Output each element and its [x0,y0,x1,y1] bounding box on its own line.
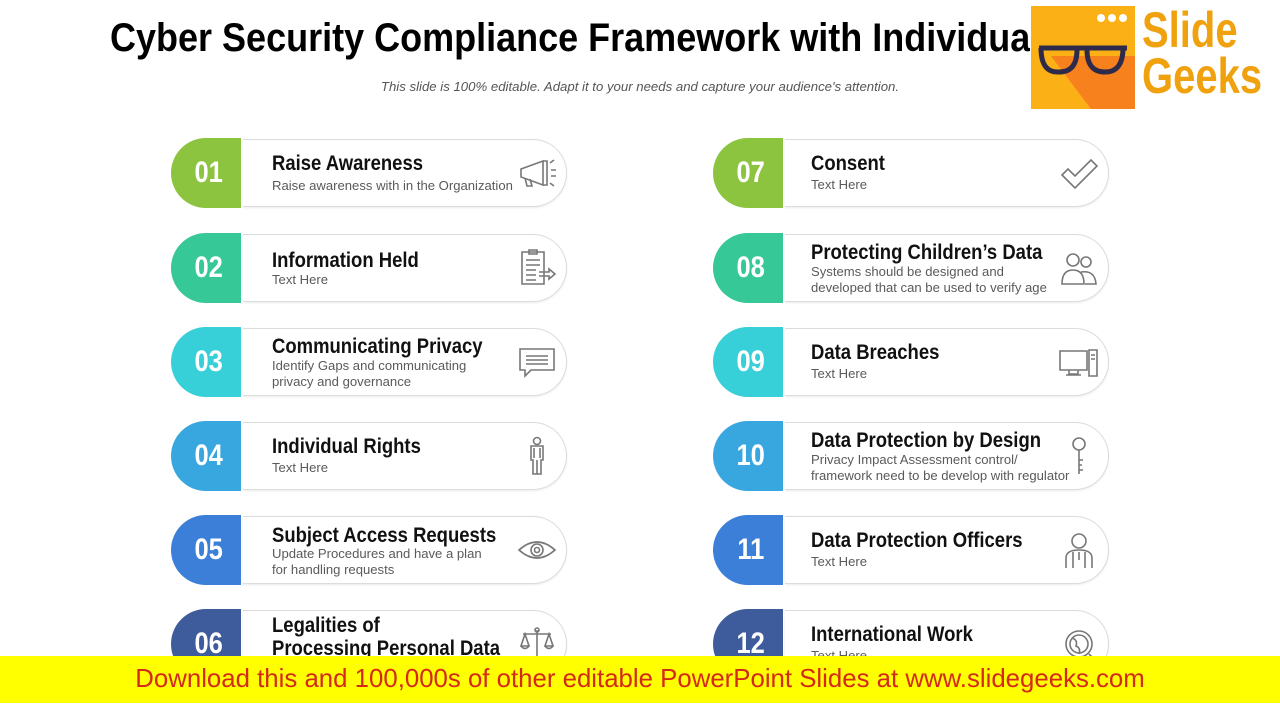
item 03: Identify Gaps and communicating [272,358,466,373]
logo icon [1031,6,1135,109]
item 01 [171,138,567,208]
item 09: Text Here [811,366,867,381]
item 07: Text Here [811,177,867,192]
icon: computer [1059,349,1098,377]
item 12: International Work [811,623,973,646]
icon: key [1072,437,1086,474]
icon: megaphone [520,160,556,187]
icon: check [1061,159,1098,189]
item 05 [171,515,567,585]
item 06: 06 [195,627,223,660]
item 03 [171,327,567,397]
item 08: developed that can be used to verify age [811,280,1047,295]
logo text [1142,2,1262,104]
item 08: 08 [737,251,765,284]
banner: Download this and 100,000s of other editable PowerPoint Slides at www.slidegeeks.com [135,665,1145,693]
item 12 [713,609,1109,663]
item 11: 11 [738,533,764,566]
item 07: 07 [737,156,765,189]
item 10: framework need to be develop with regulator [811,468,1069,483]
icon: clipboard [521,249,556,285]
icon: eye [518,541,556,559]
logo text: Geeks [1142,48,1262,104]
title: Cyber Security Compliance Framework with Individual [110,16,1040,60]
item 02 [171,233,567,303]
item 01: Raise Awareness [272,152,423,175]
panel: right column [713,138,1109,663]
icon: chat bubble [519,348,555,378]
logo text: Slide [1142,2,1238,58]
item 07 [713,138,1109,208]
item 06 [171,609,567,660]
item 09: Data Breaches [811,341,939,364]
item 08: Systems should be designed and [811,264,1004,279]
item 08: Protecting Children’s Data [811,241,1042,264]
subtitle: This slide is 100% editable. Adapt it to your needs and capture your audience's attention. [381,79,899,94]
item 04: 04 [195,439,223,472]
panel: left column [171,138,567,660]
item 06: Legalities of [272,614,380,637]
item 11: Data Protection Officers [811,529,1023,552]
item 02: 02 [195,251,223,284]
item 05: Subject Access Requests [272,524,496,547]
icon: officer [1065,533,1093,568]
item 12: 12 [737,627,765,660]
icon: person [530,436,544,475]
item 10: Data Protection by Design [811,429,1041,452]
item 01: 01 [195,156,223,189]
item 08 [713,233,1109,303]
logo: SlideGeeks [1030,5,1280,109]
item 10 [713,421,1109,491]
item 09: 09 [737,345,765,378]
item 02: Information Held [272,249,419,272]
item 05: for handling requests [272,562,394,577]
item 01: Raise awareness with in the Organization [272,178,513,193]
item 09 [713,327,1109,397]
banner [0,656,1280,703]
item 10: 10 [737,439,765,472]
item 03: privacy and governance [272,374,411,389]
item 03: 03 [195,345,223,378]
item 05: Update Procedures and have a plan [272,546,482,561]
item 06: Processing Personal Data [272,637,500,660]
item 12: Text Here [811,648,867,663]
item 10: Privacy Impact Assessment control/ [811,452,1018,467]
item 04: Individual Rights [272,435,421,458]
item 04: Text Here [272,460,328,475]
icon: scales [520,627,554,656]
item 02: Text Here [272,272,328,287]
item 07: Consent [811,152,885,175]
item 11 [713,515,1109,585]
icon: globe [1065,630,1093,656]
item 11: Text Here [811,554,867,569]
item 04 [171,421,567,491]
item 05: 05 [195,533,223,566]
icon: parents [1061,253,1097,285]
item 03: Communicating Privacy [272,335,483,358]
